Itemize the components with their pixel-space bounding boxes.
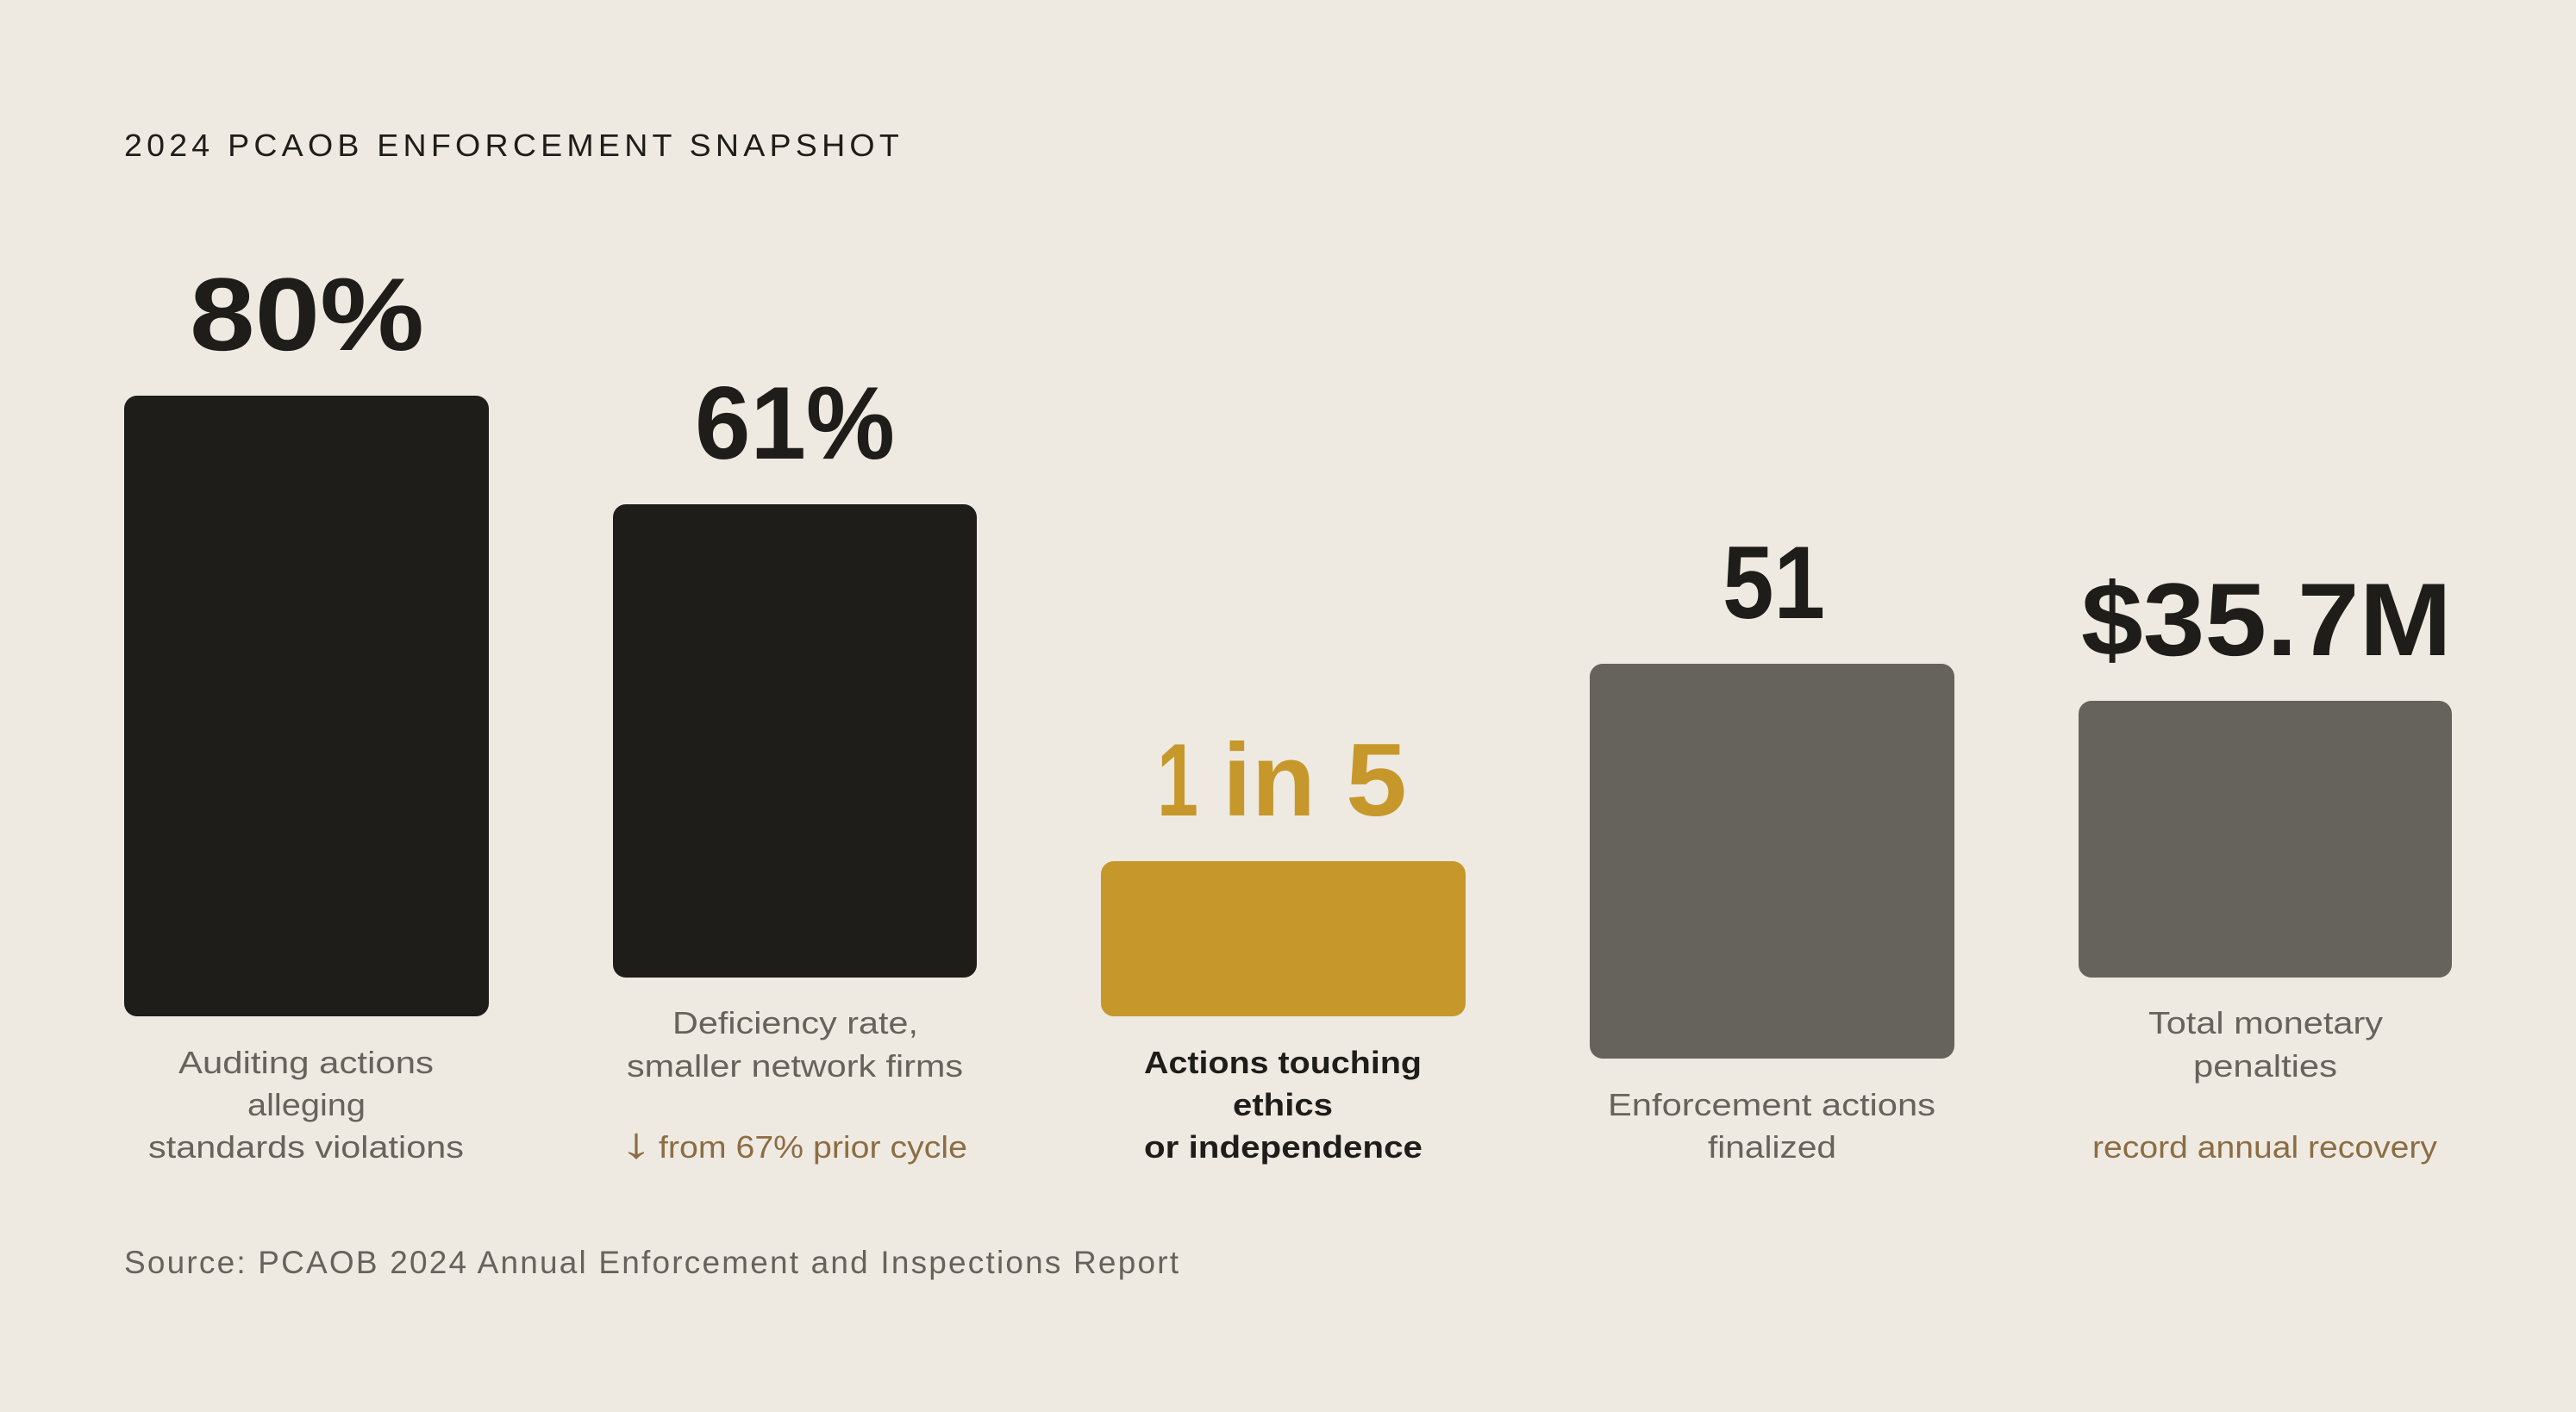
bar: 1 in 5 [1101, 861, 1466, 1016]
label: deficiency rate: Deficiency rate, [672, 1005, 918, 1040]
label: auditing actions: alleging [247, 1087, 366, 1122]
label: actions touching ethics: Actions touching [1144, 1045, 1422, 1080]
label: enforcement actions [1608, 1087, 1935, 1165]
bar: $35.7M [2079, 701, 2452, 978]
label: actions touching ethics: or independence [1144, 1129, 1422, 1165]
column: auditing actions 80% [124, 257, 489, 1165]
value: $35.7M: $35.7M [2081, 562, 2452, 678]
label: actions touching ethics: ethics [1233, 1087, 1333, 1122]
bar: 51 [1590, 664, 1954, 1059]
bar: 80% [124, 396, 489, 1016]
title: 2024 PCAOB ENFORCEMENT SNAPSHOT [124, 128, 903, 163]
value: 61%: 61% [695, 365, 895, 481]
label: auditing actions [148, 1045, 464, 1165]
label: total monetary penalties: penalties [2193, 1048, 2337, 1084]
note: from 67% prior cycle: from 67% prior cycle [659, 1129, 967, 1165]
column: enforcement actions 51 [1590, 525, 1954, 1165]
label: enforcement actions: finalized [1708, 1129, 1836, 1165]
source note: Source: PCAOB 2024 Annual Enforcement and Inspections Report [124, 1245, 1179, 1280]
value: 1 in 5: 5 [1346, 722, 1407, 838]
value: 80%: 80% [190, 257, 424, 372]
label: total monetary penalties: Total monetary [2148, 1005, 2383, 1040]
label: enforcement actions: Enforcement actions [1608, 1087, 1935, 1122]
label: total monetary penalties [2148, 1005, 2383, 1084]
note: record annual recovery: record annual recovery [2092, 1129, 2437, 1165]
column: deficiency rate 61% [613, 365, 977, 1167]
note: from 67% prior cycle: ↓ [620, 1119, 653, 1167]
column: monetary penalties $35.7M [2079, 562, 2452, 1165]
label: deficiency rate: smaller network firms [627, 1048, 963, 1084]
value: 1 in 5: in [1222, 722, 1316, 838]
bar: 61% [613, 504, 977, 978]
label: auditing actions: standards violations [148, 1129, 464, 1165]
column: ethics 1 in 5 [1101, 722, 1466, 1165]
label: actions touching ethics [1144, 1045, 1422, 1165]
label: auditing actions: Auditing actions [178, 1045, 434, 1080]
value: 51: 51 [1723, 525, 1825, 640]
label: deficiency rate [627, 1005, 963, 1084]
value: 1 in 5: 1 [1157, 722, 1198, 838]
